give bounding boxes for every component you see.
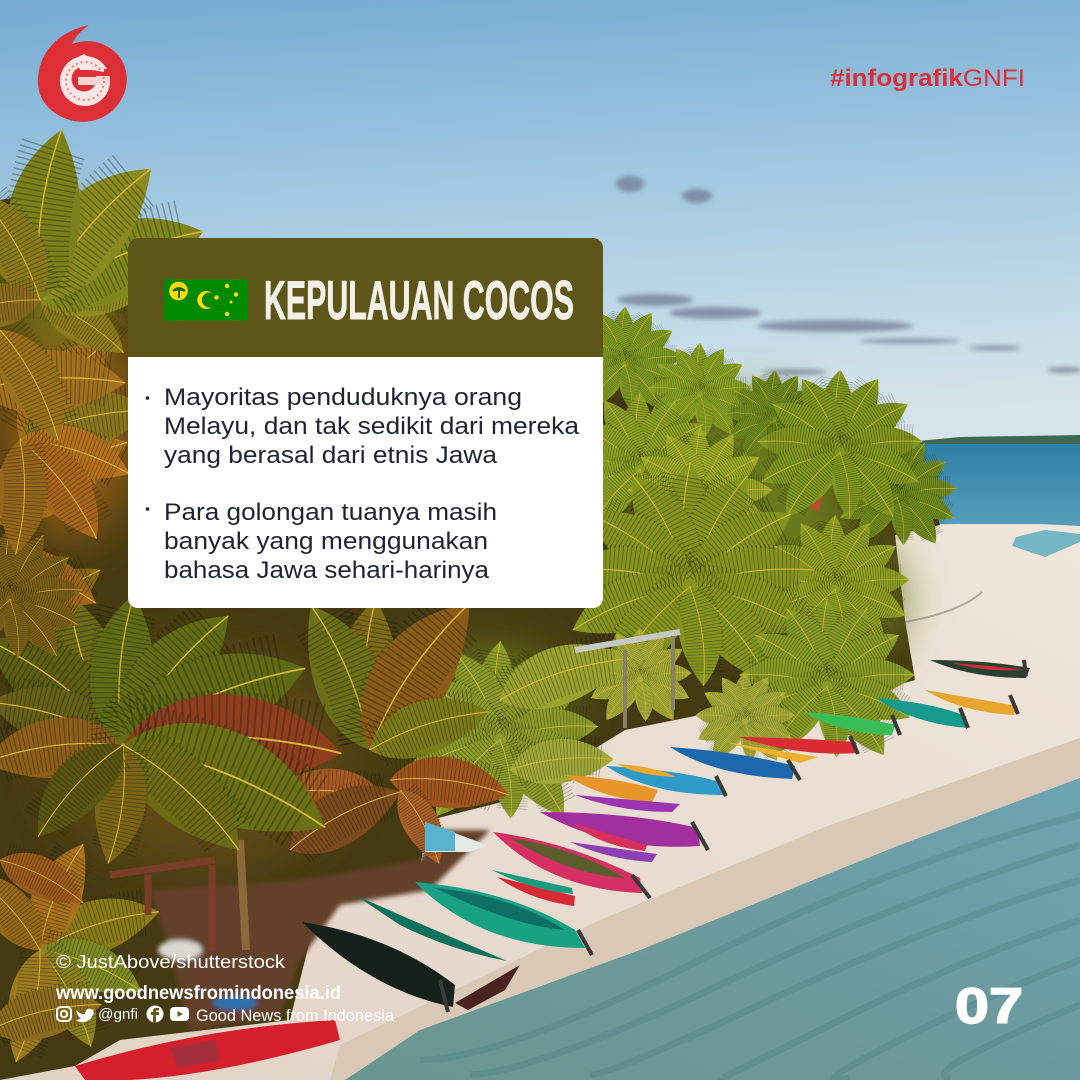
handle: @gnfi: [98, 1006, 138, 1023]
kayak: red: [738, 737, 858, 754]
social row: [57, 1006, 395, 1025]
kayak: orange small: [725, 742, 818, 763]
kayak motors: [440, 660, 1026, 1012]
background: upper-left palms: [0, 126, 215, 663]
kayak: green: [804, 712, 895, 735]
background: palm foliage mass: [0, 190, 940, 1080]
page number: 07: [955, 978, 1023, 1034]
bullet point two: bahasa Jawa sehari-harinya: [164, 557, 490, 584]
kayak: orange: [925, 690, 1018, 715]
bullet point one: [146, 384, 580, 469]
kayak: teal small paired: [492, 870, 573, 894]
kayak: black: [302, 922, 455, 1007]
kayak: dark far: [930, 660, 1030, 678]
icon: Cocos Islands flag: [164, 279, 248, 321]
kayak: blue: [670, 747, 795, 779]
bullet point one: Mayoritas penduduknya orang: [164, 384, 522, 411]
card body: [128, 238, 603, 608]
background: beach hut: [575, 632, 680, 728]
kayak: teal small: [355, 895, 507, 961]
background: lagoon: [1012, 530, 1080, 557]
background: foliage colour washes: [0, 210, 900, 870]
kayak: teal: [875, 698, 968, 728]
background: sky: [0, 0, 1080, 450]
bullet point one: Melayu, dan tak sedikit dari mereka: [164, 413, 580, 440]
bullet point two: banyak yang menggunakan: [164, 528, 488, 555]
background: right palm grove: [560, 306, 959, 766]
card header band: [128, 238, 603, 357]
background: lower-left palms: [0, 833, 165, 1067]
website: www.goodnewsfromindonesia.id: [55, 983, 341, 1004]
background: shallow water: [345, 778, 1080, 1080]
card: Kepulauan Cocos: [128, 238, 603, 608]
heading: KEPULAUAN COCOS: [264, 269, 574, 331]
kayak: pink strip: [572, 823, 647, 851]
icon: twitter: [76, 1009, 94, 1022]
icon: facebook: [146, 1006, 164, 1023]
photo credit: © JustAbove/shutterstock: [56, 952, 286, 972]
background: big palm: [0, 584, 346, 868]
kayak: purple small lower: [570, 842, 657, 862]
bullet point one: yang berasal dari etnis Jawa: [164, 442, 498, 469]
kayak: maroon bow: [455, 965, 520, 1010]
kayak: purple small: [575, 795, 680, 812]
background: distant island: [918, 435, 1080, 444]
kayaks on the beach: [75, 660, 1030, 1080]
kayak: white: [425, 822, 487, 852]
kayak: light blue: [606, 766, 723, 795]
kayak: pink: [493, 832, 642, 893]
background: sea: [900, 444, 1080, 554]
kayak: magenta: [540, 812, 700, 847]
background: water ripples: [420, 815, 1080, 1080]
kayak: teal large: [415, 882, 585, 948]
background: wet sand strip: [330, 738, 1080, 1080]
background: palm trunks: [240, 470, 825, 950]
kayak: red small: [497, 877, 575, 906]
page name: Good News from Indonesia: [196, 1006, 395, 1025]
icon: instagram: [57, 1007, 71, 1021]
background: clouds: [616, 176, 1080, 375]
hashtag: #infografik GNFI: [830, 65, 1025, 92]
bullet point two: Para golongan tuanya masih: [164, 499, 497, 526]
icon: youtube: [170, 1007, 189, 1021]
background: beach: [0, 524, 1080, 1080]
background: centre palms: [269, 578, 636, 871]
background: left hut: [110, 860, 215, 950]
background: beach shadow: [905, 592, 982, 622]
kayak: yellow stripe: [617, 764, 676, 777]
bullet point two: [146, 499, 497, 584]
logo: GNFI: [38, 25, 127, 122]
kayak: red large: [75, 1020, 340, 1080]
kayak: orange left: [565, 775, 658, 802]
background: ground debris: [150, 830, 490, 1030]
